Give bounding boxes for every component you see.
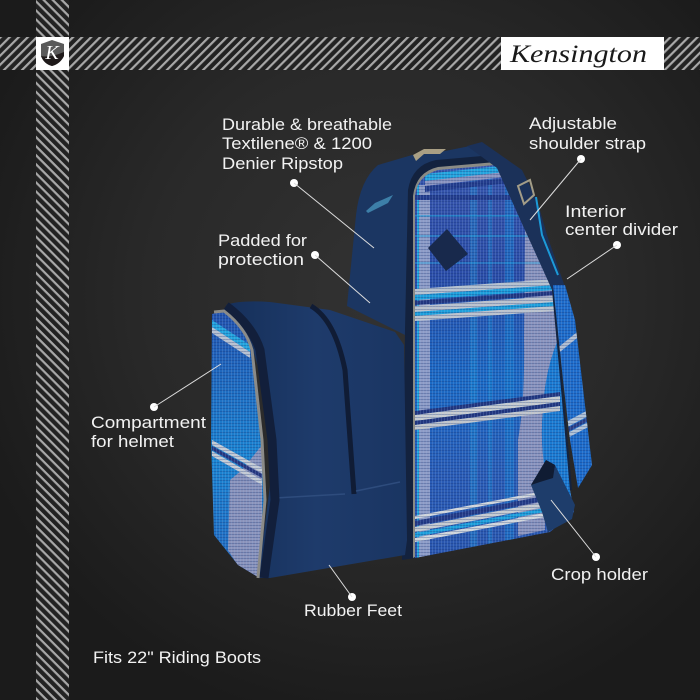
callout: shoulder strap: Adjustable: [529, 115, 617, 133]
compartment side trim: [226, 306, 275, 578]
callout: shoulder strap: [529, 115, 646, 220]
strap plaid lower part: [553, 285, 592, 488]
callout: rubber feet: [304, 565, 402, 620]
plaid bands: [415, 279, 555, 295]
callout: padded: protection: [218, 251, 304, 269]
helmet compartment body: [226, 301, 407, 578]
callout: helmet compartment: [91, 364, 221, 451]
bag back panel: [347, 146, 497, 335]
product: boot and helmet bag: [205, 142, 600, 585]
centre gusset: [402, 155, 500, 560]
callout: divider: center divider: [565, 221, 679, 239]
callout: rubber feet: Rubber Feet: [304, 602, 402, 620]
compartment plaid side: [211, 312, 264, 576]
shoulder strap: [467, 142, 565, 292]
callout: durable fabric: Denier Ripstop: [222, 155, 343, 173]
callout: helmet compartment: for helmet: [91, 433, 174, 451]
callout: durable fabric: [222, 116, 392, 248]
hatched vertical band: [36, 0, 69, 700]
compartment zip: [311, 306, 354, 494]
icon: K shield logo: [36, 37, 69, 70]
callout: shoulder strap: shoulder strap: [529, 135, 646, 153]
grey piping: [413, 162, 497, 558]
zip pull tab: [428, 229, 468, 271]
callout: helmet compartment: Compartment: [91, 414, 206, 432]
callout: crop holder: [551, 500, 649, 584]
buckle: [413, 149, 446, 161]
hatched horizontal band: [0, 37, 700, 70]
callout: padded: [218, 232, 370, 303]
note: boot fit: Fits 22" Riding Boots: [93, 649, 261, 667]
icon: K shield logo: K: [44, 42, 60, 64]
callout: durable fabric: Durable & breathable: [222, 116, 392, 134]
strap blue edge: [536, 197, 558, 275]
front plaid panel: [415, 165, 574, 558]
strap buckle: [518, 180, 534, 204]
callout: divider: Interior: [565, 203, 627, 221]
callout: durable fabric: Textilene® & 1200: [222, 135, 372, 153]
bag logo embroidery: [366, 195, 393, 213]
grey piping on compartment: [214, 311, 265, 578]
strap edge shadow: [553, 290, 571, 490]
brand logo: Kensington: [501, 37, 664, 70]
brand logo: Kensington: Kensington: [509, 41, 647, 68]
stitched seam: [275, 482, 400, 498]
callout: crop holder: Crop holder: [551, 566, 649, 584]
callout: divider: [565, 203, 679, 279]
callout: padded: Padded for: [218, 232, 308, 250]
crop holder: [531, 460, 575, 532]
